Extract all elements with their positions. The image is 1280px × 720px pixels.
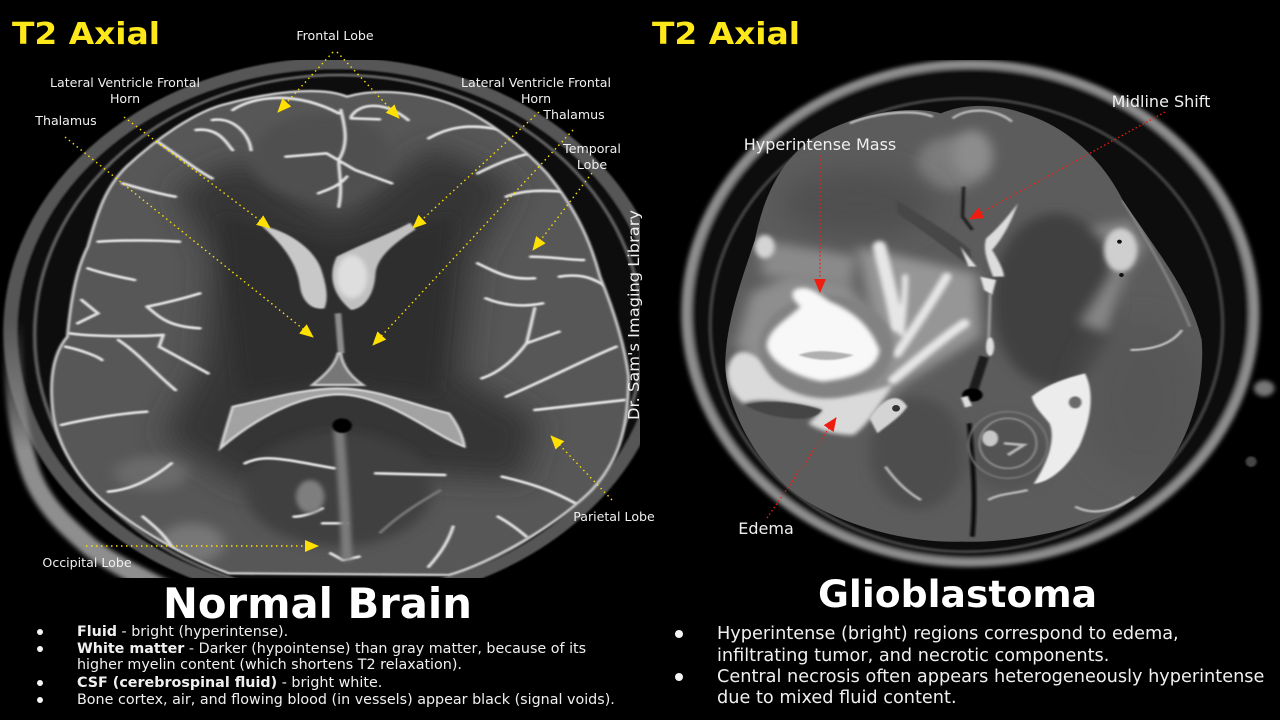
arrow: Frontal Lobe right	[337, 52, 399, 118]
label: Lateral Ventricle Frontal Horn left: Horn	[110, 91, 140, 106]
heading: Normal Brain: Normal Brain	[163, 579, 472, 628]
brain tissue	[725, 106, 1202, 542]
text block: normal brain bullets: White matter - Darker (hypointense) than gray matter, because of its	[77, 641, 586, 657]
label: Parietal Lobe: Parietal Lobe	[573, 509, 655, 524]
label: Lateral Ventricle Frontal Horn left: Lateral Ventricle Frontal	[50, 75, 200, 90]
label: Lateral Ventricle Frontal Horn right: Horn	[521, 91, 551, 106]
text block: normal brain bullets: Bone cortex, air, and flowing blood (in vessels) appear black (signal voids).	[77, 692, 615, 708]
title: T2 Axial left: T2 Axial	[12, 17, 160, 52]
labels: normal brain	[34, 28, 655, 570]
labels: glioblastoma	[738, 92, 1210, 538]
normal brain MRI scan	[0, 60, 663, 600]
label: Lateral Ventricle Frontal Horn right: Lateral Ventricle Frontal	[461, 75, 611, 90]
label: Thalamus right: Thalamus	[542, 107, 605, 122]
text block: normal brain bullets: Fluid - bright (hyperintense).	[77, 624, 288, 640]
arrow: Parietal Lobe	[551, 436, 612, 500]
arrow: Lateral Ventricle left	[124, 117, 270, 228]
glioblastoma MRI scan	[660, 60, 1280, 580]
right frontal lesion	[1079, 220, 1146, 333]
text block: normal brain bullets: CSF (cerebrospinal fluid) - bright white.	[77, 675, 382, 691]
watermark: Dr. Sam's Imaging Library	[625, 210, 643, 420]
label: Temporal Lobe: Lobe	[577, 157, 607, 172]
text block: glioblastoma bullets	[675, 624, 1264, 708]
small bright cyst	[870, 398, 907, 433]
tumor rim	[759, 295, 893, 398]
arrow: Temporal Lobe	[533, 173, 592, 250]
scalp: bright lower-left band	[13, 320, 170, 592]
head: scalp and skull rings	[10, 63, 663, 600]
scattered external marks	[1246, 380, 1274, 467]
arrow: Midline Shift	[970, 112, 1165, 219]
brain outline and ventricles	[52, 91, 629, 575]
arrow: Frontal Lobe left	[278, 52, 333, 112]
title: T2 Axial right: T2 Axial	[652, 17, 800, 52]
arrow: Lateral Ventricle right	[413, 112, 539, 228]
edema fingers	[879, 247, 964, 380]
label: Hyperintense Mass: Hyperintense Mass	[744, 135, 896, 154]
label: Midline Shift: Midline Shift	[1112, 92, 1210, 111]
arrow: Thalamus left	[65, 137, 313, 337]
head: scalp and skull rings	[686, 64, 1254, 563]
posterior lesion rings	[979, 418, 1036, 468]
arrow: Thalamus right	[373, 130, 573, 345]
annotations: glioblastoma	[767, 112, 1165, 518]
contralateral dilated ventricle	[1032, 373, 1091, 484]
arrow: Hyperintense Mass	[819, 155, 821, 292]
cortical highlights	[850, 111, 1134, 511]
text block: normal brain bullets	[37, 624, 615, 708]
peritumoral bright edema	[727, 352, 893, 435]
text block: normal brain bullets: higher myelin content (which shortens T2 relaxation).	[77, 657, 462, 673]
arrow: Edema	[767, 418, 836, 518]
text block: glioblastoma bullets: Hyperintense (bright) regions correspond to edema,	[717, 624, 1179, 644]
heading: Glioblastoma: Glioblastoma	[818, 572, 1097, 616]
text block: glioblastoma bullets: infiltrating tumor, and necrotic components.	[717, 646, 1109, 666]
label: Thalamus left: Thalamus	[34, 113, 97, 128]
text block: glioblastoma bullets: Central necrosis often appears heterogeneously hyperintense	[717, 667, 1264, 687]
sulci lines	[61, 98, 624, 567]
text block: glioblastoma bullets: due to mixed fluid content.	[717, 688, 957, 708]
MRI artwork: both brain scans and annotations	[2, 21, 1278, 578]
label: Frontal Lobe: Frontal Lobe	[296, 28, 374, 43]
label: Temporal Lobe: Temporal	[562, 141, 621, 156]
brain tissue	[52, 92, 628, 575]
arrow: Occipital Lobe	[86, 545, 318, 547]
annotations: normal brain	[65, 52, 612, 546]
hyperintense necrotic core	[767, 288, 879, 382]
frontal horns and midline	[897, 200, 972, 268]
label: Occipital Lobe: Occipital Lobe	[42, 555, 132, 570]
label: Edema: Edema	[738, 519, 794, 538]
